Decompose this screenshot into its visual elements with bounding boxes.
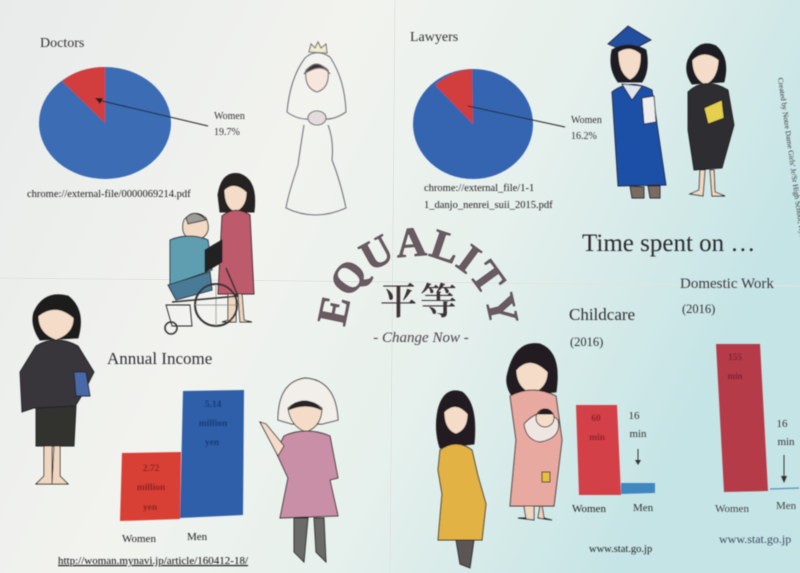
heading: annual income: Annual Income: [107, 349, 212, 368]
axis label: men: Men: [633, 502, 654, 514]
panel: lawyers: [410, 30, 602, 211]
tagline: change now: - Change Now -: [373, 330, 469, 346]
bar: men 16 min: [770, 488, 799, 489]
heading: domestic work: Domestic Work: [680, 276, 774, 292]
value: women income: 2.72: [143, 464, 160, 474]
axis label: women: Women: [715, 503, 749, 515]
logo: equality: EQUALITY: [316, 227, 520, 328]
source: stat childcare: www.stat.go.jp: [589, 544, 652, 555]
value: men 16 min: min: [777, 436, 795, 448]
value: 60 min: 60: [591, 414, 601, 424]
pie chart: doctors: [39, 67, 208, 179]
panel: domestic work: [680, 276, 799, 546]
title: equality arc: [346, 256, 490, 328]
illustration: nurse: [260, 378, 338, 562]
kanji: 平等: 平等: [380, 281, 460, 323]
label: women 19.7%: 19.7%: [214, 127, 240, 138]
heading: doctors: Doctors: [40, 36, 84, 51]
heading: time spent on: Time spent on …: [582, 230, 755, 257]
bar: men 5.14 million yen: [180, 390, 244, 518]
arrow: men domestic: [781, 455, 787, 483]
label: women 16.2%: 16.2%: [571, 131, 597, 142]
source: lawyers: 1_danjo_nenrei_suii_2015.pdf: [424, 200, 553, 211]
illustration: caregiver and wheelchair: [165, 173, 255, 334]
value: women income: million: [137, 483, 166, 493]
illustration: graduate in blue gown: [608, 26, 666, 198]
value: men 16 min: 16: [628, 410, 640, 422]
year: 2016: (2016): [682, 302, 715, 316]
axis label: men: Men: [187, 531, 208, 543]
value: men income: yen: [205, 438, 220, 448]
source: doctors: chrome://external-file/0000069214.pdf: [27, 189, 191, 200]
panel: annual income: [58, 349, 249, 567]
panel: doctors: [27, 36, 245, 200]
illustration: bride: [286, 42, 346, 215]
axis label: men: Men: [776, 500, 797, 512]
axis label: women: Women: [122, 533, 156, 545]
heading: lawyers: Lawyers: [410, 30, 458, 45]
value: men 16 min: min: [629, 428, 647, 440]
pie chart: lawyers: [413, 69, 565, 179]
value: 155 min: 155: [728, 352, 742, 362]
value: men income: million: [199, 419, 228, 429]
value: men income: 5.14: [205, 400, 222, 410]
value: men 16 min: 16: [776, 418, 788, 430]
illustration: mother holding baby: [507, 344, 562, 520]
illustration: woman in black suit: [20, 295, 94, 484]
heading: childcare: Childcare: [569, 305, 635, 324]
source: lawyers: chrome://external_file/1-1: [424, 183, 534, 194]
value: 60 min: min: [589, 433, 606, 443]
value: women income: yen: [143, 503, 158, 513]
axis label: women: Women: [572, 503, 606, 515]
panel: childcare: [569, 305, 655, 555]
panel: time spent on: [569, 230, 799, 555]
year: 2016: (2016): [570, 335, 603, 349]
value: 155 min: min: [727, 371, 743, 381]
bar: men 16 min: [621, 483, 655, 494]
bar: women 60 min: [576, 405, 621, 495]
label: women 19.7%: Women: [214, 111, 245, 122]
bar: women 155 min: [716, 344, 768, 492]
bar: women 2.72 million yen: [120, 452, 181, 521]
illustration: pregnant woman in yellow: [436, 391, 486, 568]
label: women 16.2%: Women: [571, 115, 602, 126]
source: income: http://woman.mynavi.jp/article/160412-18/: [58, 555, 249, 567]
arrow: men childcare: [635, 449, 641, 465]
source: stat domestic: www.stat.go.jp: [719, 532, 791, 546]
illustration: lawyer in black robe: [687, 44, 734, 196]
